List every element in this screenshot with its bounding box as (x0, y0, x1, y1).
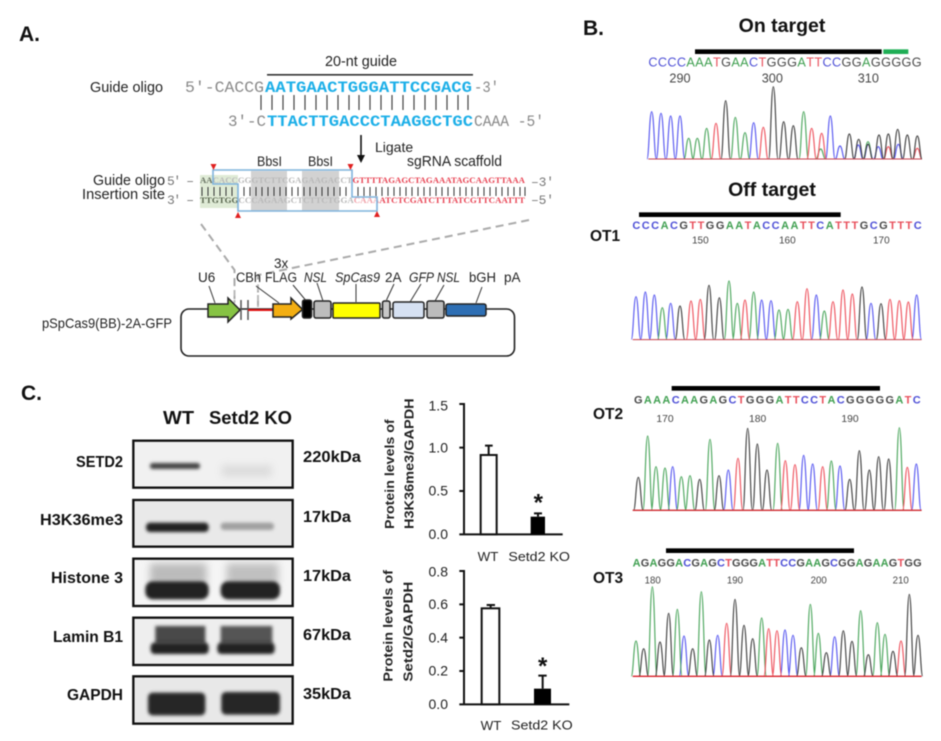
sequence: top strand guide oligo: AATGAACTGGGATTCCGACG (265, 79, 472, 97)
bar chart: Setd2/GAPDH (381, 564, 573, 733)
chromatogram: on target: 310 (858, 71, 879, 85)
feature: 3x FLAG (302, 300, 312, 318)
molecular weight labels: 220kDa (303, 449, 361, 466)
bar chart: Setd2/GAPDH: 0.6 (429, 596, 448, 612)
chromatogram: OT2: GAAACAAGAGCTGGGATTCCTACGGGGGATC (634, 395, 921, 407)
dashed guides to plasmid (201, 220, 529, 307)
blot: Lamin B1 (133, 618, 293, 665)
chromatogram: OT3: AGAGGACGAGCTGGGATTCCGAAGCGGAGAAGTGG (633, 558, 922, 570)
bar chart: H3K36me3/GAPDH: Protein levels of (382, 419, 397, 529)
chromatogram: OT3: 180 (645, 575, 661, 586)
label: OT3: OT3 (593, 570, 624, 587)
molecular weight labels (303, 449, 361, 703)
label: OT1: OT1 (590, 228, 621, 245)
column label: WT: WT (163, 408, 194, 428)
blue outline: replaced fragment (213, 170, 377, 211)
molecular weight labels: 17kDa (303, 509, 351, 526)
heading: A.: A. (19, 23, 40, 46)
feature labels: GFP (409, 270, 434, 285)
panel A: guide oligo cloning and plasmid (19, 23, 554, 356)
bar chart: Setd2/GAPDH: Protein levels of (381, 569, 396, 682)
plasmid features (208, 298, 486, 322)
feature: CBh arrow (273, 298, 302, 319)
bar chart: H3K36me3/GAPDH: WT (478, 549, 498, 564)
feature labels: 2A (385, 270, 402, 285)
blot row labels: SETD2 (76, 454, 123, 471)
sequence: top strand guide oligo: 5′-CACCG (185, 79, 264, 97)
blot row labels: GAPDH (67, 687, 123, 704)
bar chart: Setd2/GAPDH: Setd2 KO (511, 717, 573, 732)
blot row labels: H3K36me3 (40, 512, 123, 529)
blot: SETD2 (133, 441, 293, 488)
chromatogram: OT3: 190 (727, 575, 743, 586)
chromatogram: OT1: 150 (692, 235, 709, 246)
feature labels: FLAG (265, 270, 297, 285)
western blot panels (133, 441, 293, 724)
label: sgRNA scaffold: sgRNA scaffold (407, 154, 502, 170)
label: guide oligo: Guide oligo (90, 80, 163, 96)
bar chart: H3K36me3/GAPDH: Setd2 KO (508, 549, 570, 564)
feature: cloning site (241, 300, 273, 320)
label: OT2: OT2 (593, 406, 623, 423)
feature: NSL second (427, 301, 444, 318)
heading: B.: B. (583, 17, 604, 40)
label: 5 prime end: 5′ – (167, 174, 194, 189)
bar chart: H3K36me3/GAPDH (382, 398, 570, 564)
chromatogram: OT3 (631, 548, 923, 676)
chromatogram: OT2: 180 (749, 414, 767, 425)
feature: GFP (393, 302, 424, 318)
dashed guides over backbone (234, 285, 258, 307)
base pair ticks: insertion (202, 187, 525, 196)
chromatogram: OT3: 200 (811, 575, 827, 586)
base pair ticks: guide oligo (261, 95, 468, 110)
arrow: ligate (357, 135, 365, 163)
blot: Histone 3 (133, 559, 293, 606)
bar chart: Setd2/GAPDH: 0.2 (429, 663, 448, 679)
sequence: insertion lower strand: TTGTGGCCCAGAAGCTCTTCTGGA CAAAATCTCGATCTTTATCGTTCAATTT (200, 195, 525, 205)
column label: Setd2 KO: Setd2 KO (209, 408, 292, 428)
bar chart: Setd2/GAPDH: * (538, 653, 548, 680)
label: BbsI left: BbsI (257, 154, 282, 169)
chromatogram: OT1: 160 (779, 235, 796, 246)
blot: GAPDH (133, 676, 293, 724)
feature: SpCas9 (333, 303, 380, 318)
chromatogram: on target: CCCCAAATGAACTGGGATTCCGGAGGGGG (648, 55, 922, 69)
bar chart: Setd2/GAPDH: 0.0 (429, 696, 448, 712)
plasmid backbone (181, 309, 514, 356)
label: ligate: Ligate (375, 139, 413, 155)
feature labels (198, 256, 521, 285)
feature labels: 3x (274, 256, 289, 271)
blot row labels: Histone 3 (51, 570, 123, 587)
bar chart: H3K36me3/GAPDH: 1.5 (429, 398, 448, 414)
blot row labels (40, 454, 123, 704)
feature: NSL (314, 301, 331, 318)
chromatogram: OT1 (631, 212, 922, 340)
feature labels: SpCas9 (335, 270, 380, 285)
chromatogram: OT2: 190 (841, 414, 859, 425)
molecular weight labels: 67kDa (303, 627, 351, 644)
chromatogram: on target: 300 (762, 71, 783, 85)
chromatogram: on target (647, 49, 922, 159)
feature: bGH pA (446, 304, 486, 316)
sequence: bottom strand guide oligo: CAAA -5′ (474, 113, 544, 131)
feature: 2A (382, 301, 390, 318)
bracket: 20-nt guide (267, 74, 473, 76)
feature: U6 promoter arrow (208, 298, 240, 322)
bar chart: Setd2/GAPDH: 0.4 (429, 629, 448, 645)
chromatogram: on target: 290 (669, 71, 691, 85)
blot row labels: Lamin B1 (53, 629, 123, 646)
label: 5 prime end right: –5′ (531, 193, 554, 208)
heading: C.: C. (21, 382, 42, 405)
bar chart: H3K36me3/GAPDH: H3K36me3/GAPDH (401, 398, 416, 529)
cut sites: red triangles (210, 164, 380, 218)
chromatogram: OT1: CCCACGTTGGAATACCAATTCATTTGCGTTTC (632, 220, 922, 232)
sequence: top strand guide oligo: -3′ (474, 79, 499, 97)
label: insertion site: Insertion site (82, 187, 165, 203)
sequence: bottom strand guide oligo: 3′-C (228, 113, 266, 131)
bar chart: Setd2/GAPDH: Setd2/GAPDH (401, 582, 416, 682)
heading: on target: On target (739, 15, 826, 37)
bar chart: Setd2/GAPDH: WT (481, 718, 501, 733)
bar chart: H3K36me3/GAPDH: 0.5 (429, 483, 448, 499)
plasmid label: pSpCas9(BB)-2A-GFP (42, 315, 172, 331)
bar chart: H3K36me3/GAPDH: 1.0 (429, 439, 448, 455)
leader lines (209, 283, 482, 303)
label: 3 prime end: 3′ – (167, 193, 194, 208)
feature labels: U6 (198, 270, 215, 285)
heading: off target: Off target (728, 179, 816, 201)
bar chart: Setd2/GAPDH: 0.8 (429, 564, 448, 580)
sequence: top strand guide oligo (185, 79, 499, 97)
sequence: bottom strand guide oligo: TTACTTGACCCTAAGGCTGC (267, 113, 473, 131)
feature labels: NSL (437, 270, 460, 285)
panel B: sequencing traces (583, 15, 923, 676)
label: BbsI right: BbsI (308, 154, 333, 169)
sequence: insertion upper strand: AACACCGGGTCTTCGAGAAGACCT GTTTTAGAGCTAGAAATAGCAAGTTAAA (200, 175, 526, 185)
feature labels: CBh (236, 270, 261, 285)
chromatogram: OT2: 170 (656, 414, 674, 425)
insertion site shading (200, 171, 339, 211)
label: guide oligo insertion row: Guide oligo (93, 173, 165, 189)
blot: H3K36me3 (133, 500, 293, 547)
chromatogram: OT3: 210 (893, 575, 909, 586)
molecular weight labels: 17kDa (303, 568, 351, 585)
feature labels: bGH (469, 270, 496, 285)
chromatogram: OT1: 170 (873, 235, 890, 246)
molecular weight labels: 35kDa (303, 686, 351, 703)
sequence: bottom strand guide oligo (228, 113, 544, 131)
chromatogram: OT2 (633, 386, 922, 510)
label: 20-nt guide: 20-nt guide (325, 54, 397, 70)
bar chart: H3K36me3/GAPDH: * (534, 490, 544, 517)
panel C: western blots and bar charts (21, 382, 573, 733)
label: 3 prime end right: –3′ (531, 175, 554, 190)
feature labels: pA (504, 270, 521, 285)
bar chart: H3K36me3/GAPDH: 0.0 (429, 526, 448, 542)
feature labels: NSL (304, 270, 327, 285)
